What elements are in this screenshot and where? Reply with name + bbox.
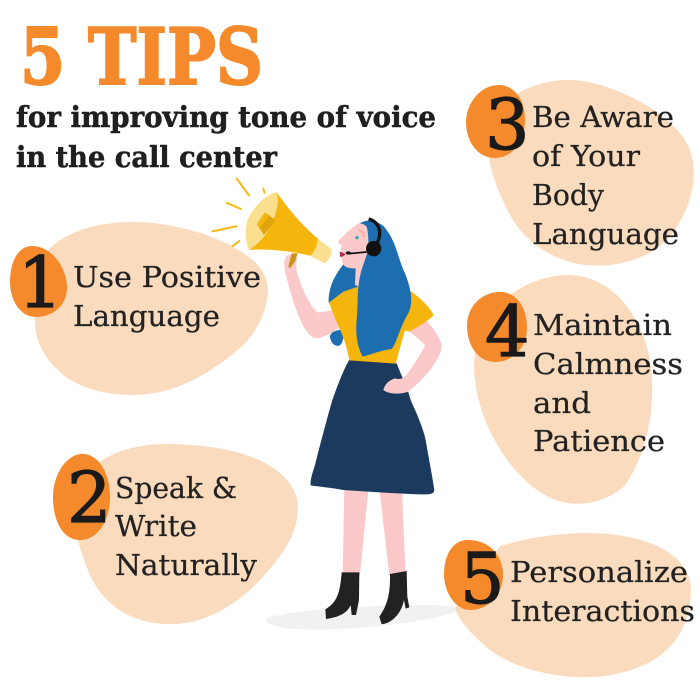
panel: tip 3: of Your (532, 139, 640, 173)
panel: tip 1 (10, 222, 268, 395)
rays (213, 179, 265, 246)
subtitle: for improving tone of voice (16, 100, 436, 134)
panel: tip 3: Language (532, 217, 679, 251)
panel: tip 1: Use Positive (73, 260, 261, 294)
panel: tip 4: and (533, 386, 591, 420)
raised arm (284, 255, 338, 338)
subtitle (16, 100, 436, 174)
panel: tip 3: Be Aware (532, 100, 674, 134)
panel: tip 2: Naturally (115, 548, 258, 582)
panel: tip 3 (466, 80, 694, 266)
panel: tip 1: 1 (18, 242, 63, 324)
panel: tip 3: Body (532, 178, 605, 212)
panel: tip 5: 5 (460, 538, 505, 620)
boots (325, 571, 409, 624)
subtitle: in the call center (16, 140, 278, 174)
face details (358, 230, 364, 237)
panel: tip 4: Maintain (533, 308, 672, 342)
panel: tip 5: Personalize (510, 555, 688, 589)
panel: tip 1: Language (73, 299, 220, 333)
skirt (311, 358, 434, 494)
panel: tip 2 (53, 444, 298, 624)
megaphone (246, 192, 332, 268)
hair back (329, 264, 358, 346)
shirt (329, 287, 434, 364)
floor shadow (266, 605, 460, 630)
panel: tip 2: Speak & (115, 471, 237, 505)
neck and head (338, 222, 373, 287)
headset (369, 219, 380, 245)
panel: tip 4: Calmness (533, 347, 683, 381)
panel: tip 4: 4 (485, 291, 530, 373)
panel: tip 3: 3 (485, 84, 530, 166)
panel: tip 2: 2 (67, 457, 112, 539)
panel: tip 4 (467, 275, 683, 504)
illustration: woman with megaphone (213, 179, 442, 624)
panel: tip 5: Interactions (510, 594, 695, 628)
title: 5 TIPS (20, 12, 263, 103)
other arm (383, 317, 442, 394)
lower body (311, 358, 434, 624)
hair front (356, 221, 411, 357)
panel: tip 4: Patience (533, 424, 665, 458)
panel: tip 5 (444, 533, 695, 677)
panel: tip 2: Write (115, 509, 197, 543)
upper body (213, 179, 442, 394)
legs (343, 487, 406, 575)
